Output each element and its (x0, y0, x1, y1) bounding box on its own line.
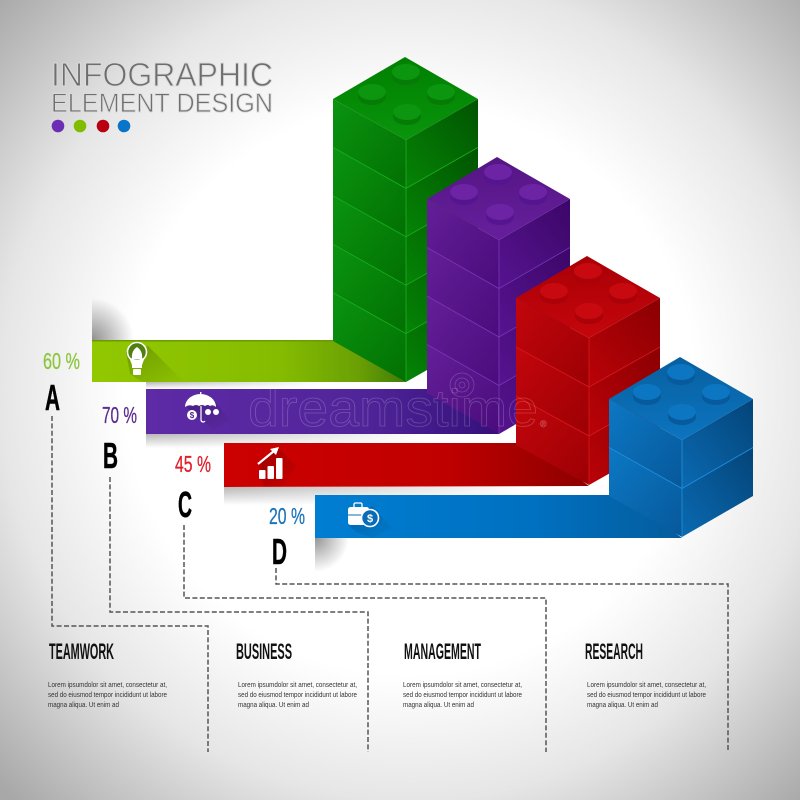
section letters: C (178, 484, 192, 525)
red ribbon (224, 443, 589, 487)
percent labels: 20 % (269, 503, 305, 529)
purple brick stack (427, 157, 570, 434)
text block: management: magna aliqua. Ut enim ad (403, 702, 474, 709)
watermark: dreamstime (248, 380, 538, 438)
section letters: A (45, 377, 60, 418)
percent labels: 45 % (175, 451, 211, 477)
blue brick stack (609, 357, 753, 537)
icon: lightbulb with person (126, 342, 184, 382)
section letters: B (103, 435, 118, 476)
green brick stack (333, 57, 478, 382)
section letters (45, 377, 287, 572)
text block: teamwork: Lorem ipsumdolor sit amet, consectetur at, (48, 682, 167, 689)
text block: management (403, 639, 522, 709)
text block: research: RESEARCH (585, 639, 643, 664)
text block: business: magna aliqua. Ut enim ad (238, 702, 309, 709)
text block: research (585, 639, 706, 709)
title: ELEMENT DESIGN (51, 88, 273, 118)
percent labels (43, 348, 305, 529)
dashed connector lines (52, 416, 728, 752)
icon: growth chart (258, 447, 296, 487)
text block: teamwork: magna aliqua. Ut enim ad (48, 702, 119, 709)
text block: management: sed do eiusmod tempor incididunt ut labore (403, 692, 522, 699)
text block: business: Lorem ipsumdolor sit amet, consectetur at, (238, 682, 357, 689)
red brick stack (516, 256, 660, 485)
text block: teamwork: TEAMWORK (49, 639, 114, 664)
text block: management: Lorem ipsumdolor sit amet, consectetur at, (403, 682, 522, 689)
percent labels: 60 % (43, 348, 80, 374)
blue ribbon (315, 495, 682, 538)
icon: umbrella with coins: $ (190, 411, 195, 420)
text block: research: Lorem ipsumdolor sit amet, consectetur at, (587, 682, 706, 689)
percent labels: 70 % (102, 402, 137, 428)
text block: research: sed do eiusmod tempor incididunt ut labore (587, 692, 706, 699)
section letters: D (272, 531, 287, 572)
blue studs (633, 364, 730, 425)
text block: teamwork: sed do eiusmod tempor incididunt ut labore (48, 692, 167, 699)
icon: umbrella with coins (185, 392, 230, 430)
green studs (358, 64, 455, 125)
text block: business (236, 639, 357, 709)
ribbon shadows (92, 302, 488, 570)
red studs (540, 263, 637, 324)
color dots (52, 120, 130, 132)
text block: research: magna aliqua. Ut enim ad (587, 702, 658, 709)
text block: business: BUSINESS (236, 639, 292, 664)
icon: briefcase with dollar: $ (367, 513, 373, 525)
text block: teamwork (48, 639, 167, 709)
text block: management: MANAGEMENT (404, 639, 481, 664)
green ribbon (92, 340, 406, 382)
purple studs (450, 164, 547, 225)
icon: briefcase with dollar (348, 503, 392, 538)
title: INFOGRAPHIC (51, 56, 273, 93)
text block: business: sed do eiusmod tempor incididunt ut labore (238, 692, 357, 699)
purple ribbon (146, 389, 499, 434)
watermark: ® (540, 419, 547, 429)
title (51, 56, 273, 118)
